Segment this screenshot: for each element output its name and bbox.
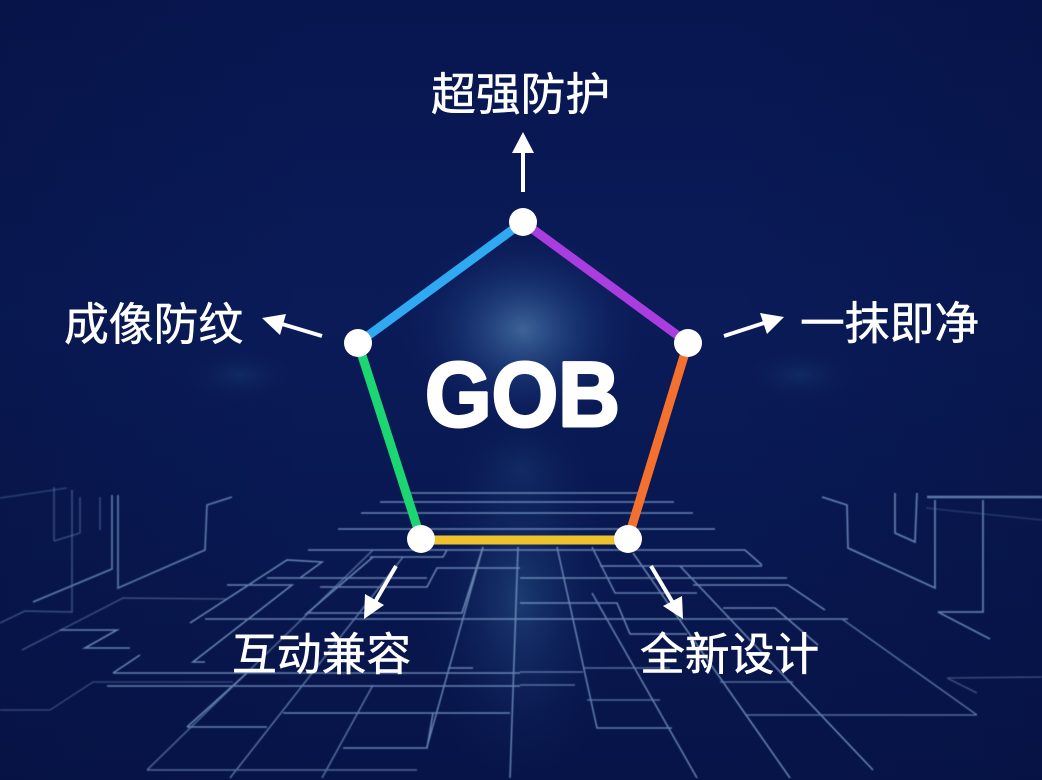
- edge: blue: [358, 222, 523, 343]
- pentagon: [344, 208, 702, 553]
- arrow: left: [262, 314, 322, 336]
- node: right: [674, 329, 702, 357]
- node: bottom right: [614, 525, 642, 553]
- arrow: bottom left: [364, 566, 396, 619]
- node: bottom left: [407, 525, 435, 553]
- edge: green: [358, 343, 421, 539]
- arrow: top: [512, 132, 534, 192]
- label: bottom right: 全新设计: [640, 630, 819, 680]
- label: bottom left: 互动兼容: [232, 630, 411, 680]
- edge: yellow: [421, 536, 628, 544]
- perspective floor grid: [0, 493, 1042, 778]
- arrow: bottom right: [651, 566, 683, 619]
- label: right: 一抹即净: [800, 299, 979, 349]
- right circuit lines: [822, 493, 1042, 639]
- edge: orange: [628, 343, 688, 539]
- arrow: right: [724, 313, 784, 336]
- left circuit lines: [0, 487, 232, 623]
- center title GOB: GOB: [425, 344, 620, 446]
- node: left: [344, 329, 372, 357]
- label: top: 超强防护: [431, 70, 610, 120]
- node: top: [509, 208, 537, 236]
- edge: purple: [523, 222, 688, 343]
- label: left: 成像防纹: [64, 300, 243, 350]
